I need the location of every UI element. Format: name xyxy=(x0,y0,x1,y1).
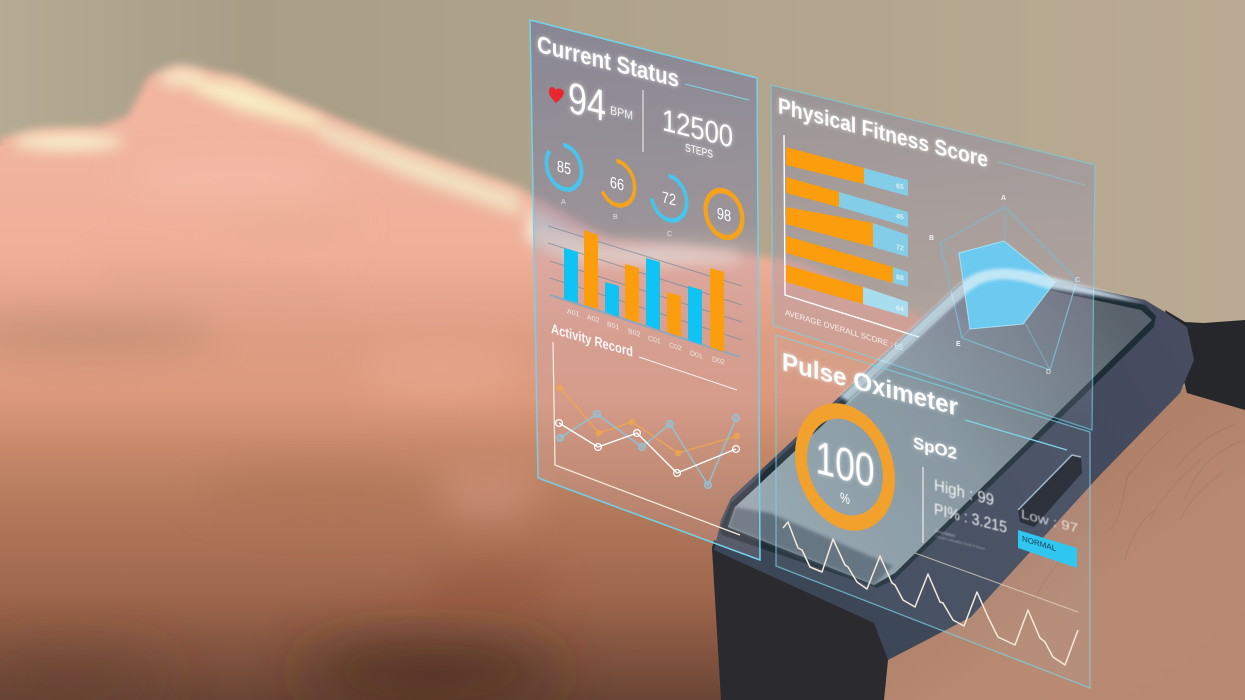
heading rule xyxy=(965,420,1067,450)
ring gauge 72: 72 xyxy=(662,189,676,210)
ring gauge 66 xyxy=(599,157,635,209)
blurred hand xyxy=(0,65,1000,700)
watch case xyxy=(714,266,1194,660)
watch strap bottom xyxy=(712,540,888,700)
horizontal bar chart: 65 xyxy=(896,183,904,192)
horizontal bar chart xyxy=(784,135,919,337)
title: Physical Fitness Score: Physical Fitness Score xyxy=(778,93,988,173)
heading rule xyxy=(639,357,737,390)
divider xyxy=(922,467,924,543)
heart rate: 94 BPM: BPM xyxy=(610,103,633,123)
title: Current Status: Current Status xyxy=(537,31,679,93)
ring gauge 85 xyxy=(546,141,582,193)
bar chart: daily activity: D01 xyxy=(690,349,703,361)
readings: PI% : 3.215 xyxy=(934,500,1007,537)
radar chart: C xyxy=(1075,277,1080,284)
watch strap top xyxy=(1165,310,1245,410)
rule xyxy=(915,553,1078,612)
heart rate: 94 BPM: 94 xyxy=(568,74,606,131)
line chart: activity record xyxy=(553,342,740,535)
pulse waveform xyxy=(783,522,1078,665)
panel: physical fitness score xyxy=(771,85,1095,430)
bar chart: daily activity: B02 xyxy=(628,327,640,339)
radar chart: A xyxy=(1001,195,1006,202)
status tag: normal xyxy=(1018,530,1077,568)
bar chart: daily activity: A01 xyxy=(567,307,579,319)
label: SpO2: SpO2 xyxy=(913,432,957,463)
readings: Low : 97 xyxy=(1021,506,1078,536)
watch button xyxy=(1018,455,1082,527)
heading rule xyxy=(998,162,1085,185)
horizontal bar chart: 88 xyxy=(896,274,904,283)
status tag: normal: NORMAL xyxy=(1022,534,1057,553)
horizontal bar chart: 64 xyxy=(896,305,904,314)
bar chart: daily activity: A02 xyxy=(587,313,599,325)
title: Pulse Oximeter: Pulse Oximeter xyxy=(782,348,958,422)
bar chart: daily activity xyxy=(548,226,742,367)
heading rule xyxy=(685,84,749,100)
ring gauge: 100 percent: % xyxy=(840,489,850,508)
horizontal bar chart: 45 xyxy=(896,213,904,222)
ring labels: A xyxy=(561,199,566,206)
icon: heart xyxy=(549,87,564,103)
smartwatch xyxy=(712,266,1245,700)
readings xyxy=(934,476,1078,551)
steps: 12500: STEPS xyxy=(685,142,713,161)
bar chart: daily activity: C02 xyxy=(669,341,682,353)
average score note: AVERAGE OVERALL SCORE : 65 xyxy=(785,308,903,352)
watch bezel xyxy=(720,272,1156,588)
radar chart: E xyxy=(956,341,961,348)
ring gauge: 100 percent xyxy=(801,401,889,533)
radar chart xyxy=(929,195,1080,376)
readings: Oxygen saturation level in blood xyxy=(935,534,985,551)
readings: High : 99 xyxy=(934,476,994,510)
ring gauge 72 xyxy=(651,172,687,224)
ring gauge 85: 85 xyxy=(557,158,571,179)
ring gauge 98: 98 xyxy=(717,205,731,226)
ring labels xyxy=(561,199,672,238)
divider xyxy=(642,90,644,152)
ring labels: B xyxy=(613,214,618,221)
screen lower frame xyxy=(728,507,893,585)
ring labels: C xyxy=(667,231,672,238)
steps: 12500: 12500 xyxy=(662,102,733,155)
ring gauge 66: 66 xyxy=(610,174,624,195)
panel: current status xyxy=(530,20,760,560)
ring gauge 98 xyxy=(706,186,742,242)
bar chart: daily activity: C01 xyxy=(648,334,661,346)
radar chart: D xyxy=(1046,369,1051,376)
horizontal bar chart: 72 xyxy=(896,244,904,253)
screen edge reflection xyxy=(840,269,1145,402)
heading: Activity Record: Activity Record xyxy=(551,321,633,361)
radar chart: B xyxy=(929,235,934,242)
watch screen xyxy=(728,278,1152,585)
readings: Description xyxy=(935,528,955,538)
bar chart: daily activity: B01 xyxy=(607,320,619,332)
arm hair texture xyxy=(1035,425,1245,600)
ring gauge: 100 percent: 100 xyxy=(815,431,875,497)
forearm skin xyxy=(860,385,1245,700)
bar chart: daily activity: D02 xyxy=(712,355,725,367)
panel: pulse oximeter xyxy=(776,335,1090,688)
